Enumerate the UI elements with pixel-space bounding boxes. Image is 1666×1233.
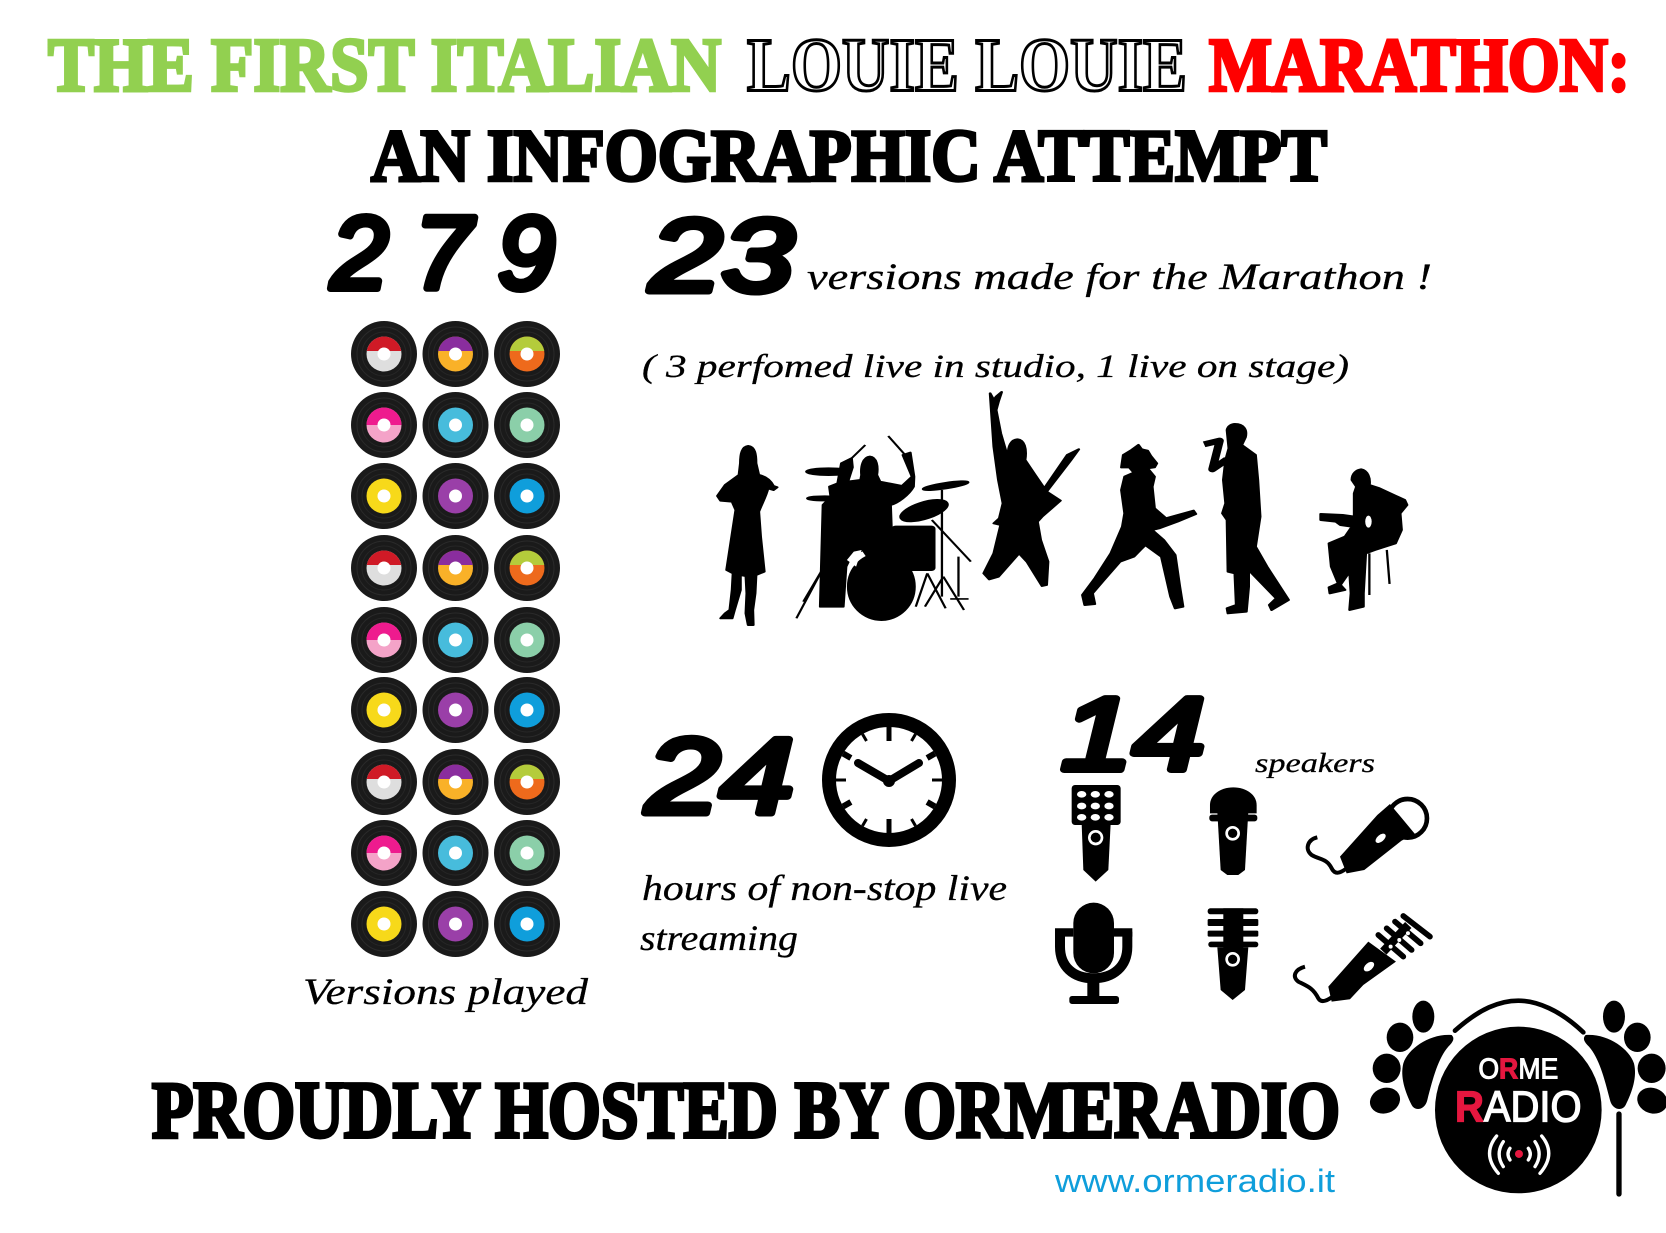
logo headband (1455, 1001, 1583, 1032)
caption: speakers: speakers (1255, 748, 1375, 778)
left paw (1366, 1001, 1453, 1118)
caption: hours of non-stop live streaming: streaming (640, 918, 798, 958)
silhouette: rocker with guitar (1082, 445, 1196, 608)
stat: 24: 24 (645, 716, 794, 836)
silhouette: violinist (717, 446, 777, 625)
logo wordmark orme: ORME (1478, 1053, 1558, 1085)
icon: tilted mic with cord (1308, 799, 1427, 873)
silhouette: drummer (796, 436, 971, 620)
logo signal waves (1490, 1136, 1549, 1173)
vinyl record stack (351, 321, 560, 957)
title line one (48, 24, 1630, 108)
title line two: AN INFOGRAPHIC ATTEMPT (371, 116, 1327, 198)
title line one: LOUIE LOUIE (747, 24, 1187, 108)
footer: proudly hosted by ormeradio: PROUDLY HOSTED BY ORMERADIO (152, 1067, 1340, 1155)
logo: orme radio (1366, 1001, 1666, 1194)
icon: desk mic (1055, 903, 1132, 1004)
caption: versions played: Versions played (303, 972, 589, 1013)
icon: round head mic (1209, 787, 1257, 875)
footer: website link: www.ormeradio.it (1054, 1163, 1335, 1199)
silhouette: seated guitarist (1321, 469, 1407, 610)
band silhouettes (717, 392, 1407, 625)
caption: performed live: ( 3 perfomed live in studio, 1 live on stage) (642, 349, 1349, 385)
stat: 23: 23 (649, 198, 794, 313)
caption: hours of non-stop live streaming (640, 868, 1007, 958)
caption: versions made for the marathon: versions made for the Marathon ! (807, 257, 1432, 298)
icon: square grille mic (1072, 785, 1121, 882)
icon: clock (829, 720, 949, 840)
stat: 14: 14 (1061, 676, 1205, 792)
logo wordmark radio: RADIO (1455, 1083, 1582, 1131)
icon: tilted striped mic with cord (1295, 916, 1430, 1002)
silhouette: singer (1204, 424, 1289, 613)
logo disc (1435, 1027, 1602, 1193)
right paw (1584, 1001, 1666, 1118)
microphone icons (1055, 785, 1430, 1004)
mic stick (1611, 1114, 1627, 1194)
icon: striped mic (1208, 908, 1258, 1000)
title line one: THE FIRST ITALIAN (48, 24, 721, 108)
caption: hours of non-stop live streaming: hours of non-stop live (642, 868, 1007, 908)
stat: 279: 279 (330, 196, 555, 310)
silhouette: jumping guitarist (984, 392, 1079, 586)
